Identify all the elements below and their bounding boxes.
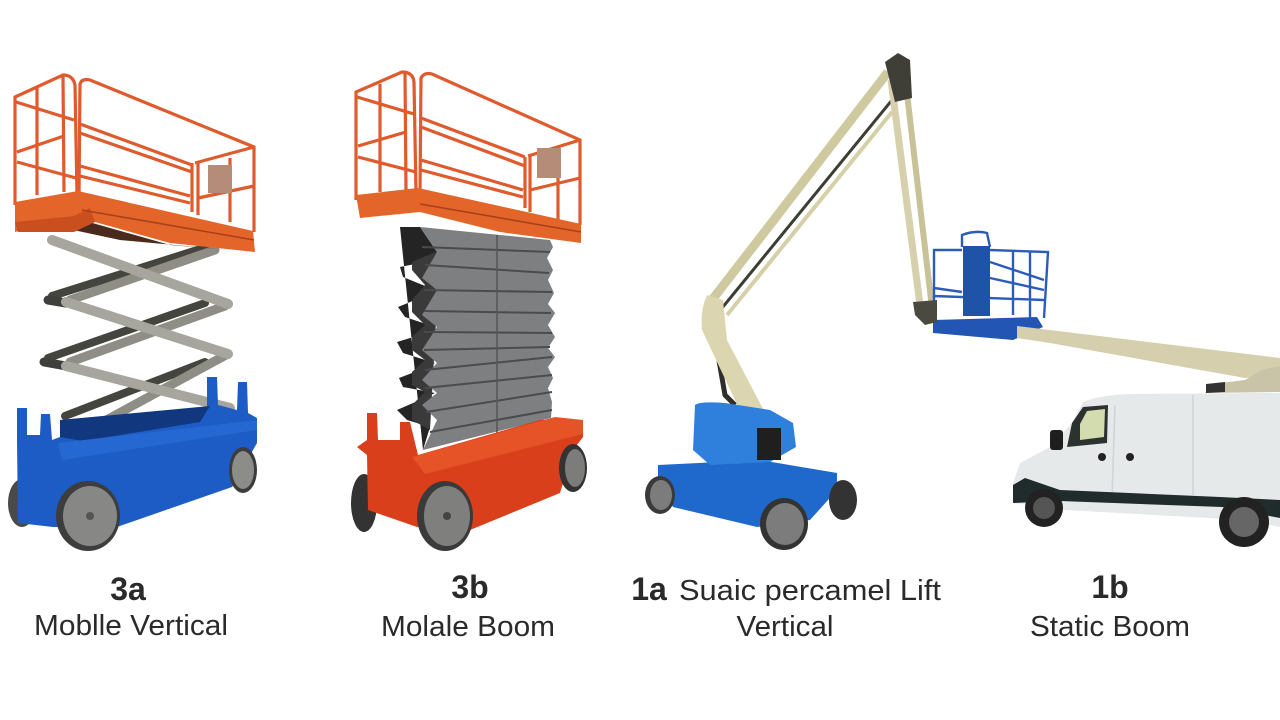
van body xyxy=(1013,393,1280,527)
blue chassis xyxy=(17,377,257,527)
scissor arms xyxy=(44,240,230,430)
wheels xyxy=(559,444,587,492)
label 1a xyxy=(631,571,941,643)
boom mount xyxy=(1205,366,1280,393)
lift 3a: blue scissor lift xyxy=(8,75,257,551)
windscreen and door window xyxy=(1067,405,1108,447)
boom arms xyxy=(712,72,932,315)
boom joint xyxy=(913,300,937,325)
label 1a: 1a xyxy=(631,571,667,607)
label 3b xyxy=(381,569,555,643)
red chassis xyxy=(357,413,583,530)
stacked column xyxy=(420,227,555,450)
label 3a: Moblle Vertical xyxy=(34,610,228,642)
dark folds xyxy=(397,227,437,450)
wheels xyxy=(229,447,257,493)
guard rails xyxy=(356,72,580,225)
label 3b: 3b xyxy=(451,569,489,605)
platform underside xyxy=(50,218,228,250)
platform deck xyxy=(15,191,255,252)
lower boom xyxy=(1017,326,1280,378)
van wheels xyxy=(1025,489,1063,527)
guard rails xyxy=(15,75,254,232)
hydraulic cylinder xyxy=(718,355,735,405)
label 1b xyxy=(1030,569,1190,643)
label 3b: Molale Boom xyxy=(381,611,555,643)
label 1a: Suaic percamel Lift xyxy=(679,575,941,607)
control box xyxy=(537,148,561,178)
label 1a: Vertical xyxy=(736,611,834,643)
lift 1a: articulated boom lift xyxy=(645,53,932,550)
black side stripe xyxy=(1013,478,1280,518)
lift 3b: red column lift xyxy=(351,72,587,551)
mirror xyxy=(1050,430,1063,450)
label 3a xyxy=(34,571,228,642)
platform deck and rails xyxy=(356,72,581,243)
control box xyxy=(208,165,232,193)
wheel: rear left xyxy=(8,479,36,527)
column backing xyxy=(412,250,440,430)
bucket base xyxy=(933,317,1043,340)
wheel: rear left xyxy=(351,474,377,532)
wheels xyxy=(645,476,675,514)
label 3a: 3a xyxy=(110,571,146,607)
label 1b: Static Boom xyxy=(1030,611,1190,643)
blue base xyxy=(658,460,837,527)
bucket xyxy=(934,232,1048,318)
turret xyxy=(693,402,796,465)
lift 1b: van-mounted boom xyxy=(913,232,1280,547)
label 1b: 1b xyxy=(1091,569,1129,605)
